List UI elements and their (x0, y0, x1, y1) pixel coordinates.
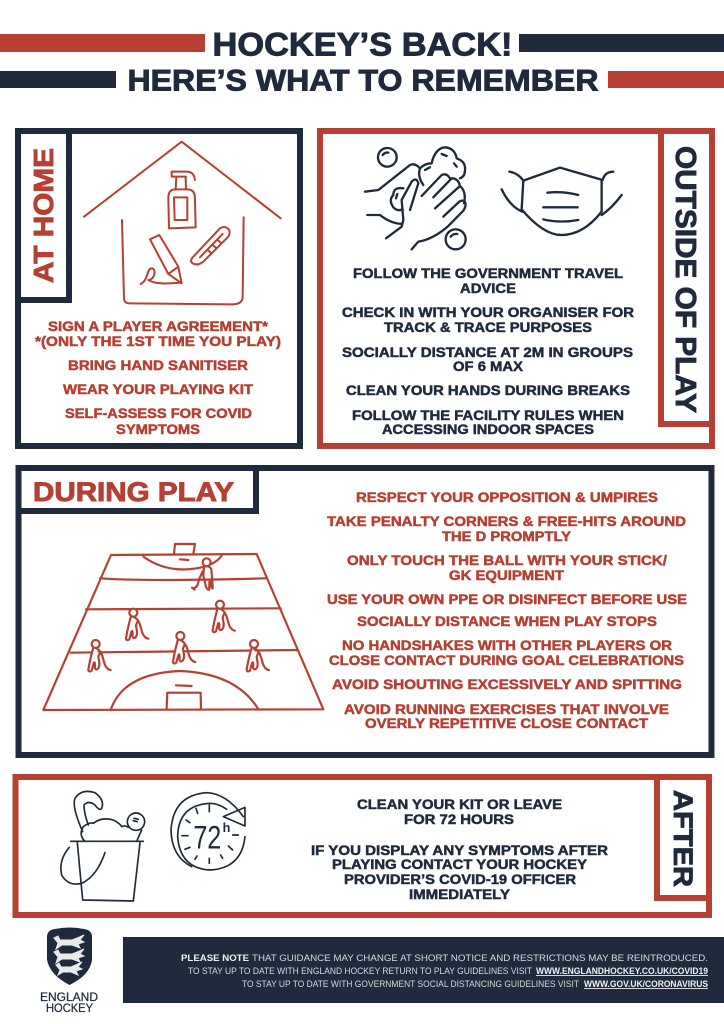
footer: guidance note: THAT GUIDANCE MAY CHANGE AT SHORT NOTICE AND RESTRICTIONS MAY BE REINTRODUCED. (252, 953, 708, 964)
during play checklist: RESPECT YOUR OPPOSITION & UMPIRES (356, 490, 658, 505)
outside of play checklist: ACCESSING INDOOR SPACES (382, 422, 594, 437)
outside of play checklist: CHECK IN WITH YOUR ORGANISER FOR (342, 305, 634, 320)
outside of play checklist: CLEAN YOUR HANDS DURING BREAKS (346, 383, 630, 398)
after checklist: IMMEDIATELY (409, 887, 510, 902)
outside of play checklist (342, 266, 634, 437)
heading: during play: DURING PLAY (33, 477, 234, 507)
during play checklist: NO HANDSHAKES WITH OTHER PLAYERS OR (342, 638, 672, 653)
during play checklist: AVOID RUNNING EXERCISES THAT INVOLVE (344, 702, 669, 717)
player (88, 640, 111, 672)
outside of play checklist: OF 6 MAX (453, 359, 523, 374)
icon: 72 hour clock: 72 (193, 819, 221, 855)
icon: house with sanitiser, pen and thermometer (84, 142, 281, 304)
after checklist: CLEAN YOUR KIT OR LEAVE (357, 797, 562, 812)
at home checklist: SYMPTOMS (116, 422, 200, 437)
outside of play checklist: TRACK & TRACE PURPOSES (384, 320, 592, 335)
outside of play checklist: SOCIALLY DISTANCE AT 2M IN GROUPS (342, 345, 633, 360)
title line 2: HERE’S WHAT TO REMEMBER (128, 64, 599, 98)
outside of play checklist: ADVICE (460, 281, 516, 296)
player (126, 609, 148, 640)
during play checklist: USE YOUR OWN PPE OR DISINFECT BEFORE USE (327, 592, 687, 607)
after checklist (311, 797, 608, 902)
during play checklist: ONLY TOUCH THE BALL WITH YOUR STICK/ (347, 553, 667, 568)
icon: 72 hour clock: h (223, 821, 230, 835)
icon: face mask (502, 168, 622, 235)
title line 1: HOCKEY’S BACK! (212, 26, 512, 62)
footer note bar (123, 937, 724, 1003)
panel: during play (18, 468, 712, 755)
footer: guidance note: PLEASE NOTE (181, 953, 250, 964)
footer: government link: TO STAY UP TO DATE WITH GOVERNMENT SOCIAL DISTANCING GUIDELINES VISIT (242, 979, 580, 989)
during play checklist: CLOSE CONTACT DURING GOAL CELEBRATIONS (329, 653, 684, 668)
panel: outside of play (320, 131, 712, 446)
panel: after (16, 777, 709, 915)
during play checklist: GK EQUIPMENT (449, 568, 565, 583)
during play checklist: SOCIALLY DISTANCE WHEN PLAY STOPS (357, 614, 657, 629)
at home checklist: BRING HAND SANITISER (68, 358, 248, 373)
logo: England Hockey (40, 928, 98, 1015)
player with stick and ball (192, 558, 213, 590)
after checklist: PLAYING CONTACT YOUR HOCKEY (332, 857, 587, 872)
panel: at home (18, 131, 300, 446)
after checklist: FOR 72 HOURS (404, 812, 514, 827)
logo wordmark: ENGLAND (40, 990, 98, 1004)
during play checklist: THE D PROMPTLY (442, 529, 571, 544)
player (173, 632, 195, 664)
logo wordmark (40, 990, 98, 1015)
logo wordmark: HOCKEY (46, 1001, 93, 1015)
icon: shield with three lions (47, 928, 92, 985)
footer: England Hockey link (188, 966, 708, 976)
at home checklist: *(ONLY THE 1ST TIME YOU PLAY) (35, 334, 281, 349)
player (247, 640, 269, 672)
during play checklist: OVERLY REPETITIVE CLOSE CONTACT (365, 716, 649, 731)
during play checklist (327, 490, 687, 731)
icon: 72 hour clock (171, 793, 245, 870)
outside of play checklist: FOLLOW THE FACILITY RULES WHEN (352, 408, 624, 423)
heading: outside of play: OUTSIDE OF PLAY (669, 146, 701, 413)
at home checklist: SIGN A PLAYER AGREEMENT* (48, 319, 269, 334)
after checklist: PROVIDER’S COVID-19 OFFICER (344, 872, 576, 887)
heading: at home: AT HOME (28, 148, 59, 283)
outside of play checklist: FOLLOW THE GOVERNMENT TRAVEL (353, 266, 623, 281)
at home checklist: WEAR YOUR PLAYING KIT (63, 382, 254, 397)
during play checklist: AVOID SHOUTING EXCESSIVELY AND SPITTING (332, 677, 682, 692)
during play checklist: TAKE PENALTY CORNERS & FREE-HITS AROUND (327, 514, 686, 529)
at home checklist: SELF-ASSESS FOR COVID (65, 406, 252, 421)
heading: after: AFTER (668, 790, 698, 887)
after checklist: IF YOU DISPLAY ANY SYMPTOMS AFTER (311, 843, 608, 858)
icon: hand washing (365, 147, 466, 249)
player (213, 601, 235, 632)
hockey pitch with players (43, 544, 323, 710)
at home checklist (35, 319, 281, 437)
footer: England Hockey link: WWW.ENGLANDHOCKEY.CO.UK/COVID19 (536, 966, 708, 976)
icon: bucket of soapy water with stick (61, 791, 145, 901)
footer: England Hockey link: TO STAY UP TO DATE WITH ENGLAND HOCKEY RETURN TO PLAY GUIDELINES VISIT (188, 966, 533, 976)
header banner (0, 26, 724, 98)
footer: government link: WWW.GOV.UK/CORONAVIRUS (584, 979, 708, 989)
